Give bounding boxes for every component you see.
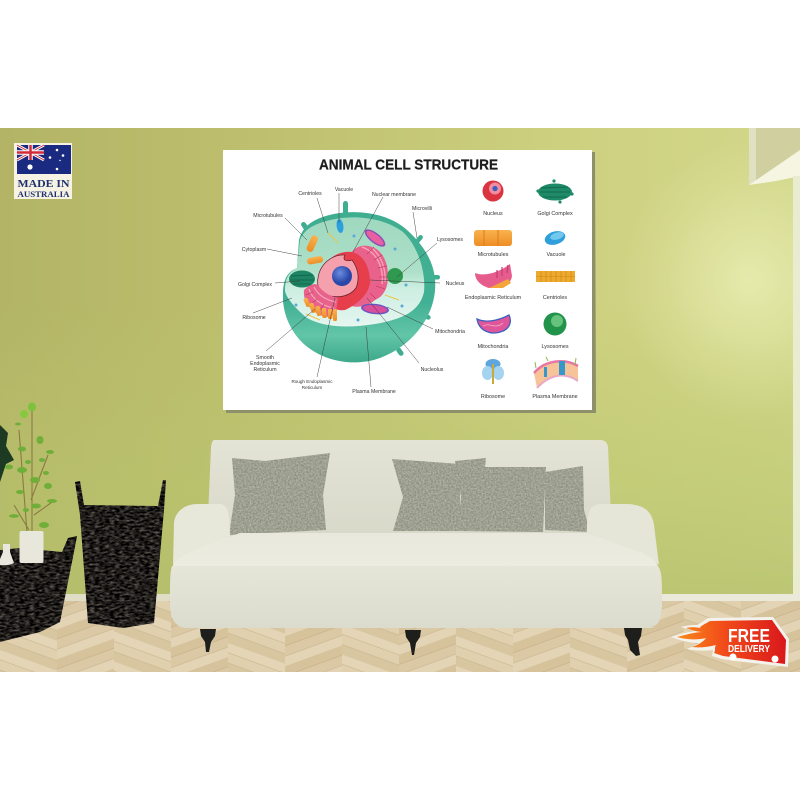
room: herringbone floor: [0, 601, 800, 672]
flag: [17, 145, 71, 174]
organelle: ribosome: [481, 359, 505, 400]
badge: made in australia: [14, 143, 72, 199]
golgi complex: [289, 270, 315, 288]
cell labels: Cytoplasm: [242, 247, 266, 253]
cell labels: Nuclear membrane: [372, 192, 416, 198]
pillow 2: [392, 459, 460, 531]
cell labels: Mitochondria: [435, 329, 465, 335]
cell labels: Endoplasmic: [250, 361, 280, 367]
rough ER lower left folds: [304, 284, 338, 317]
pillow 4: [545, 466, 590, 532]
nucleus interior: [318, 255, 358, 297]
room: window recess at top right: [749, 128, 800, 601]
left arm: [173, 504, 230, 565]
vase: [20, 531, 44, 563]
organelle: endoplasmic reticulum: Endoplasmic Reticulum: [465, 295, 522, 301]
pillow 1: [229, 453, 330, 535]
right arm: [587, 504, 659, 565]
seat cushion: [173, 533, 658, 567]
plant with vase: [5, 402, 57, 532]
organelle: golgi complex: [536, 179, 574, 217]
cytoplasm: [285, 217, 424, 326]
cell leader lines: [253, 193, 440, 387]
canvas print shadow: [226, 152, 596, 413]
foot right: [624, 628, 642, 656]
badge text: FREE: [728, 626, 770, 646]
nucleus outer red envelope: [316, 252, 370, 310]
cell labels: Microvilli: [412, 206, 432, 212]
pillow 3: [455, 458, 546, 532]
ribosome dots: [294, 234, 408, 322]
organelle: microtubules: Microtubules: [478, 252, 509, 258]
organelle: endoplasmic reticulum: [465, 264, 522, 301]
organelle: mitochondria: [477, 315, 510, 350]
cell labels: Rough Endoplasmic: [291, 379, 333, 384]
dark plant at left edge: [0, 425, 14, 482]
organelle: vacuole: [543, 229, 567, 258]
small white bottle: [0, 544, 14, 565]
organelle: vacuole: Vacuole: [546, 252, 566, 258]
centriole filaments: [306, 233, 399, 320]
cell labels: Smooth: [256, 355, 274, 361]
organelle: plasma membrane: [532, 357, 578, 400]
cell body: [283, 212, 435, 362]
cell labels: Nucleolus: [421, 367, 444, 373]
cell labels: Nucleus: [446, 281, 465, 287]
organelle: nucleus: [482, 180, 504, 217]
foot left: [200, 629, 216, 652]
cell labels: [238, 187, 465, 395]
mitochondrion upper: [362, 226, 388, 250]
badge: free delivery: DELIVERY: [728, 644, 770, 655]
basket right: [75, 480, 166, 628]
organelle: nucleus: Nucleus: [483, 211, 503, 217]
organelle: lysosomes: [541, 312, 569, 350]
foot middle: [405, 630, 421, 655]
canvas print: [223, 150, 592, 410]
organelle: microtubules: [474, 230, 512, 258]
smooth ER orange fingers: [303, 297, 337, 321]
microvilli bumps: [292, 201, 440, 357]
cell labels: Plasma Membrane: [352, 389, 396, 395]
van shape: [677, 620, 786, 664]
organelle: lysosomes: Lysosomes: [541, 344, 569, 350]
cell labels: Lysosomes: [437, 237, 463, 243]
wheels: [730, 654, 778, 662]
vacuole: [336, 219, 344, 233]
organelle: centrioles: [536, 271, 575, 301]
organelle: ribosome: Ribosome: [481, 394, 505, 400]
main cell diagram: [283, 201, 440, 362]
cell labels: Ribosome: [242, 315, 266, 321]
cell labels: Vacuole: [335, 187, 353, 193]
badge: free delivery: [671, 617, 789, 667]
room: wall: [0, 128, 800, 603]
title: ANIMAL CELL STRUCTURE: [319, 156, 498, 173]
nucleolus: [332, 266, 352, 286]
sofa: [170, 440, 662, 656]
sofa front: [170, 566, 662, 628]
cell labels: Microtubules: [253, 213, 283, 219]
badge: made in australia: AUSTRALIA: [18, 189, 70, 199]
cell labels: Reticulum: [253, 367, 277, 373]
cell labels: Centrioles: [298, 191, 322, 197]
cell labels: Reticulum: [302, 385, 322, 390]
rough ER right folds: [350, 246, 388, 307]
sofa back: [207, 440, 612, 540]
microtubule organelles: [306, 234, 323, 265]
room: skirting board: [60, 594, 800, 602]
van outline: [671, 617, 789, 667]
lysosome: [387, 268, 403, 284]
organelle: mitochondria: Mitochondria: [478, 344, 508, 350]
organelle: golgi complex: Golgi Complex: [537, 211, 573, 217]
mitochondrion lower: [361, 302, 389, 316]
organelle: centrioles: Centrioles: [543, 295, 567, 301]
basket left: [0, 536, 77, 642]
organelle: plasma membrane: Plasma Membrane: [532, 394, 578, 400]
cell labels: Golgi Complex: [238, 282, 272, 288]
badge text: MADE IN: [18, 179, 70, 190]
